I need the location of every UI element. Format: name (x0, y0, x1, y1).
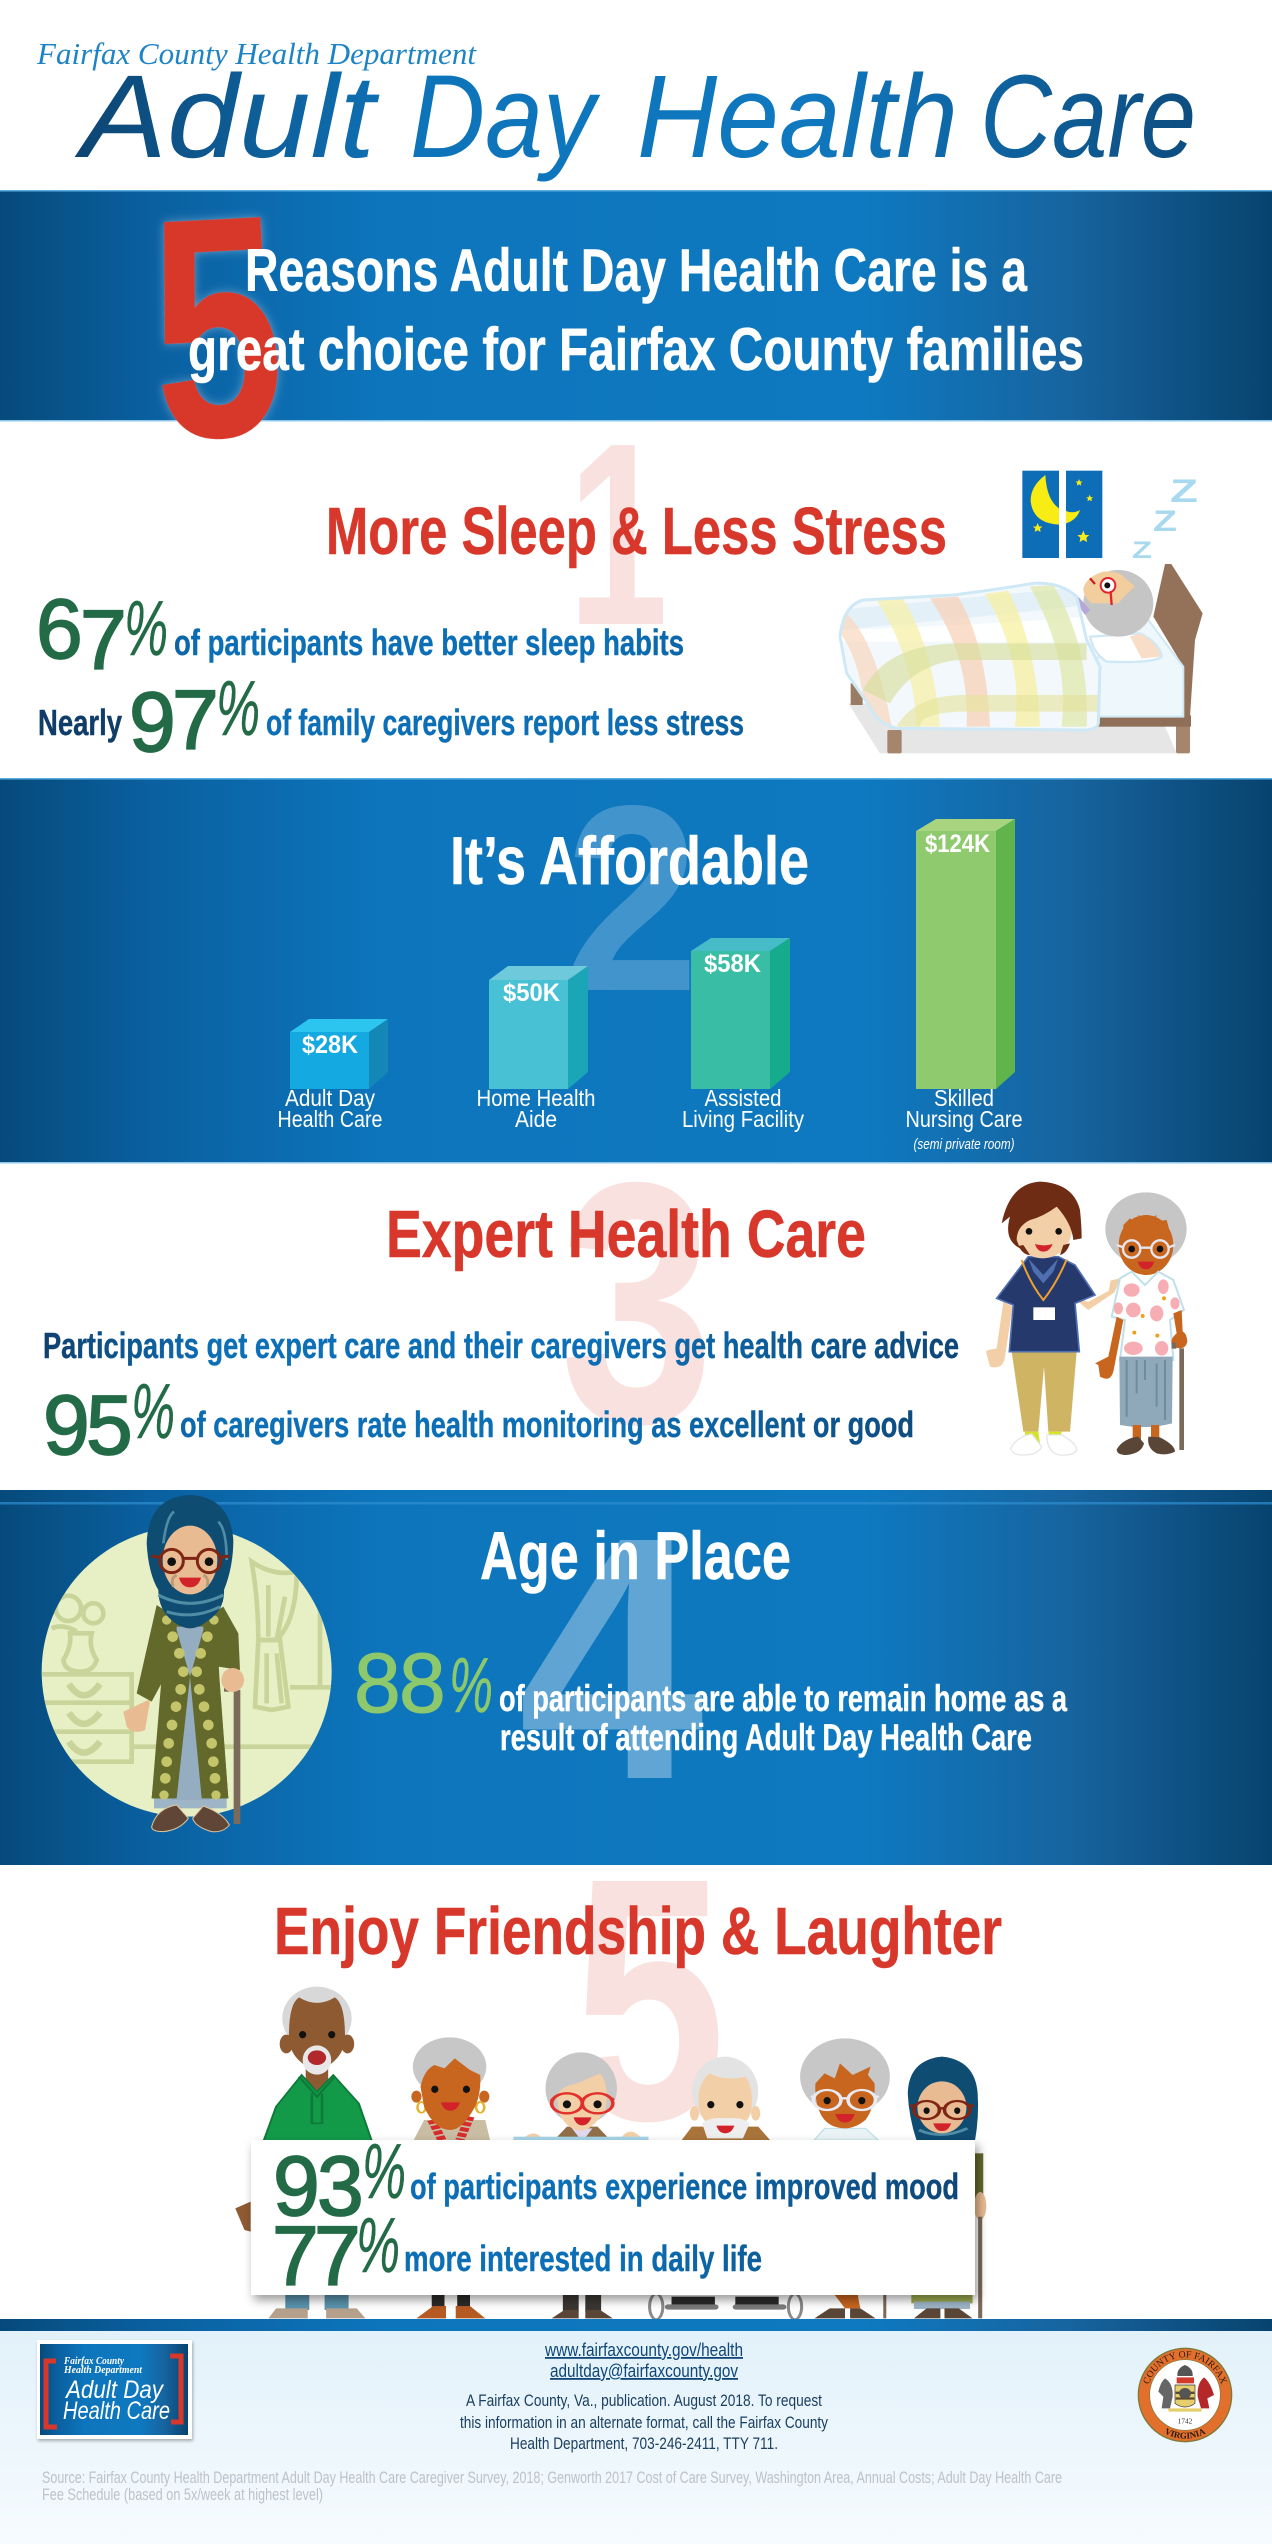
bar: skilled nursing care: $124K (925, 830, 990, 858)
heading: Expert Health Care (386, 1197, 866, 1272)
stat 88 percent: % (449, 1641, 493, 1729)
icon: county seal: VIRGINIA (1166, 2428, 1206, 2439)
bar: home health aide: Aide (515, 1106, 557, 1132)
bar: assisted living facility: Living Facility (682, 1106, 804, 1132)
main title: Health (637, 51, 958, 183)
stat 67 percent (36, 582, 684, 687)
publication note: Health Department, 703-246-2411, TTY 711. (510, 2435, 778, 2453)
big red five: 5 (143, 148, 291, 506)
nurse (986, 1182, 1118, 1455)
bar: skilled nursing care: Nursing Care (906, 1106, 1022, 1132)
bar: assisted living facility (682, 938, 804, 1132)
publication note: this information in an alternate format, call the Fairfax County (460, 2414, 829, 2432)
contact links: adultday@fairfaxcounty.gov (550, 2361, 738, 2381)
bar: assisted living facility: $58K (704, 950, 761, 978)
stat 67 percent: of participants have better sleep habits (174, 622, 684, 663)
bar: adult day health care: $28K (302, 1031, 358, 1059)
stat 97 percent (38, 664, 744, 769)
older woman (1095, 1192, 1187, 1455)
main title: Day (410, 51, 600, 183)
stat 93 percent (273, 2127, 959, 2233)
logo: adult day health care: Health Department (63, 2365, 143, 2376)
woman with red glasses (513, 2052, 649, 2318)
stat 95 percent (43, 1367, 914, 1472)
header (36, 36, 1196, 183)
stat 97 percent: of family caregivers report less stress (266, 702, 744, 743)
stat 97 percent: 7 (172, 673, 219, 767)
logo: adult day health care (37, 2340, 192, 2439)
source note: Fee Schedule (based on 5x/week at highest level) (42, 2485, 323, 2504)
bar: skilled nursing care (906, 819, 1022, 1153)
logo: adult day health care: Adult Day (64, 2376, 164, 2404)
stat 95 percent: % (131, 1367, 175, 1455)
stat 95 percent: 5 (86, 1378, 133, 1472)
icon: sleeping z letters: Z (1153, 505, 1177, 538)
text: remain home (499, 1678, 1067, 1758)
main title (74, 51, 1196, 183)
stat 67 percent: 6 (36, 582, 83, 676)
panel: reason 2 affordable (0, 751, 1272, 1164)
stat 88 percent: 8 (354, 1636, 401, 1730)
stat 67 percent: 7 (80, 593, 127, 687)
heading: Age in Place (480, 1518, 791, 1594)
illustration: nurse and older woman (986, 1182, 1187, 1455)
stat 93 percent: % (362, 2127, 406, 2215)
icon: sleeping z letters: Z (1132, 537, 1152, 564)
pale number 3: 3 (560, 1111, 714, 1495)
stat 77 percent: 7 (272, 2209, 319, 2303)
panel: reason 4 age in place (0, 1466, 1272, 1865)
heading: Enjoy Friendship & Laughter (274, 1894, 1002, 1969)
stat 88 percent (354, 1636, 493, 1730)
bar: adult day health care: Adult Day (285, 1085, 375, 1111)
icon: sleeping z letters (1132, 473, 1198, 564)
stat 97 percent: % (216, 664, 260, 752)
source note (42, 2468, 1062, 2504)
panel: reason 3 expert care (43, 1111, 1187, 1495)
publication note: A Fairfax County, Va., publication. August 2018. To request (466, 2392, 822, 2410)
stat 95 percent: of caregivers rate health monitoring as excellent or good (180, 1404, 914, 1445)
icon: sleeping z letters: Z (1170, 473, 1198, 509)
main title: Care (980, 51, 1196, 183)
icon: county seal: 1742 (1178, 2416, 1193, 2425)
bar: adult day health care: Health Care (278, 1106, 382, 1132)
illustration: group of older adults (235, 1987, 986, 2319)
bar: home health aide: $50K (503, 979, 560, 1007)
bar: assisted living facility: Assisted (704, 1085, 782, 1111)
stat 97 percent: 9 (129, 675, 176, 769)
bar chart (278, 819, 1022, 1153)
contact links: www.fairfaxcounty.gov/health (544, 2340, 743, 2360)
stat 77 percent: more interested in daily life (404, 2238, 762, 2279)
icon: county seal: COUNTY OF FAIRFAX (1144, 2351, 1227, 2384)
banner heading: Reasons Adult Day Health Care is a (245, 237, 1027, 304)
stat 93 percent: 3 (317, 2139, 364, 2233)
bar: skilled nursing care: (semi private room) (914, 1136, 1014, 1153)
stat 67 percent: % (124, 584, 168, 672)
heading: More Sleep & Less Stress (326, 494, 947, 569)
text: expert care line: Participants get expert care and their caregivers get health care advice (43, 1325, 959, 1366)
stat 77 percent: % (356, 2201, 400, 2289)
footer (0, 2319, 1272, 2544)
contact links (544, 2340, 743, 2381)
publication note (460, 2392, 829, 2453)
woman with earrings (411, 2037, 490, 2318)
pale number 5: 5 (572, 1807, 726, 2193)
woman in headscarf (908, 2057, 986, 2318)
department name: Fairfax County Health Department (36, 36, 477, 71)
callout: mood statistics (251, 2127, 975, 2303)
panel: reason 5 friendship (235, 1807, 1002, 2319)
woman with white glasses (800, 2038, 890, 2318)
banner: 5 reasons (0, 148, 1272, 506)
stat 93 percent: 9 (273, 2139, 320, 2233)
icon: window with moon (1022, 471, 1102, 558)
bar: home health aide (476, 966, 596, 1132)
stat 95 percent: 9 (43, 1378, 90, 1472)
bar: skilled nursing care: Skilled (934, 1085, 994, 1111)
bar: adult day health care (278, 1019, 388, 1132)
logo: adult day health care: Health Care (63, 2397, 170, 2425)
panel: reason 1 sleep and stress (39, 445, 1203, 754)
bar: home health aide: Home Health (476, 1085, 596, 1111)
text: remain home: of participants are able to remain home as a (499, 1678, 1067, 1719)
man with white beard (650, 2057, 802, 2319)
man in green shirt (235, 1987, 372, 2318)
pale number 4: 4 (518, 1466, 706, 1852)
pale number 2: 2 (565, 751, 699, 1047)
stat 93 percent: of participants experience improved mood (410, 2166, 959, 2207)
stat 77 percent (272, 2201, 762, 2303)
stat 77 percent: 7 (314, 2209, 361, 2303)
stat 97 percent: Nearly (38, 702, 122, 743)
main title: Adult (74, 51, 380, 183)
banner heading (188, 237, 1084, 383)
illustration: person asleep in bed (837, 564, 1203, 753)
icon: county seal (1138, 2348, 1232, 2442)
logo: adult day health care: Fairfax County (63, 2356, 124, 2367)
heading: It’s Affordable (450, 823, 809, 899)
stat 88 percent: 8 (399, 1636, 446, 1730)
pale number 1: 1 (568, 390, 668, 680)
text: remain home: result of attending Adult Day Health Care (500, 1717, 1032, 1758)
illustration: woman in headscarf at home (40, 1495, 332, 1832)
